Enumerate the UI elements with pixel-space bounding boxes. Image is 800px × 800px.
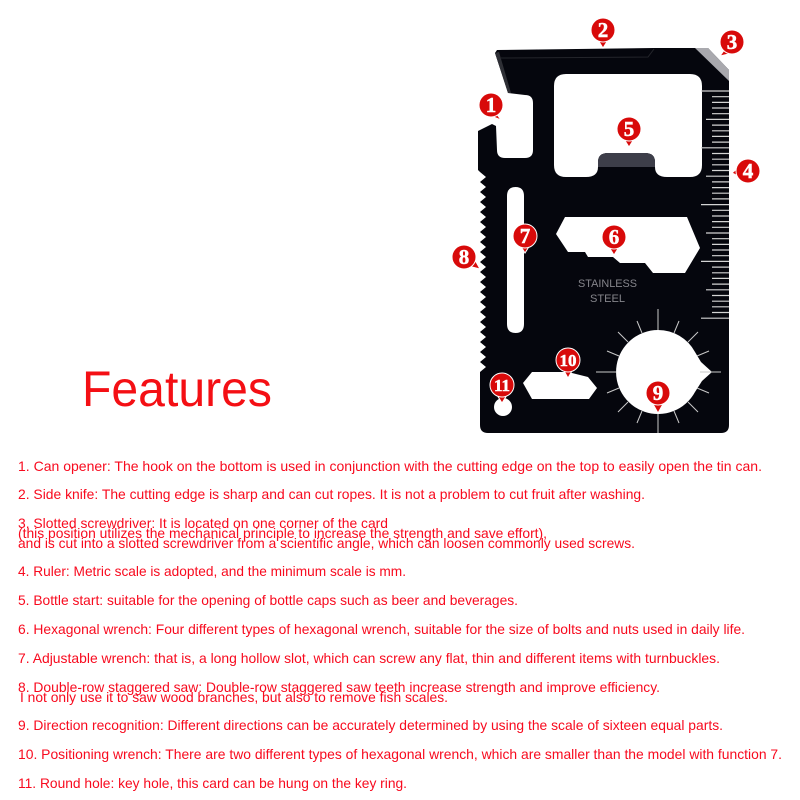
feature 8: 8. Double-row staggered saw: Double-row staggered saw teeth increase strength and improve efficiency. — [18, 679, 660, 695]
marker 8 — [452, 245, 480, 269]
marker 5 — [617, 117, 641, 147]
heading: Features: Features — [82, 361, 272, 417]
feature 1: 1. Can opener: The hook on the bottom is used in conjunction with the cutting edge on the top to easily open the tin can. — [18, 458, 762, 474]
feature 11: 11. Round hole: key hole, this card can be hung on the key ring. — [18, 775, 407, 791]
marker 3 — [720, 30, 744, 56]
marker 10: 10 — [560, 351, 576, 370]
marker 6 — [602, 225, 626, 255]
marker 6: 6 — [609, 225, 619, 249]
can opener blade bevel — [495, 52, 511, 93]
marker 8: 8 — [459, 245, 469, 269]
marker 11: 11 — [494, 376, 510, 395]
marker 9: 9 — [653, 381, 663, 405]
bottle opener lip — [598, 153, 655, 167]
marker 5: 5 — [624, 117, 634, 141]
multi-tool card illustration — [452, 18, 760, 433]
feature 3 — [18, 515, 635, 551]
stainless steel engraving — [578, 278, 637, 305]
ruler ticks — [701, 91, 729, 318]
marker 1 — [479, 93, 503, 120]
feature 9: 9. Direction recognition: Different directions can be accurately determined by using the scale of sixteen equal parts. — [18, 717, 723, 733]
marker 11 — [490, 373, 514, 403]
screwdriver bevel — [695, 48, 729, 81]
feature 5: 5. Bottle start: suitable for the opening of bottle caps such as beer and beverages. — [18, 592, 518, 608]
stainless steel engraving: STAINLESS — [578, 278, 637, 290]
feature 3: and is cut into a slotted screwdriver from a scientific angle, which can loosen commonly used screws. — [18, 535, 635, 551]
marker 4 — [732, 159, 760, 183]
feature 3: 3. Slotted screwdriver: It is located on one corner of the card — [18, 515, 388, 531]
marker 7: 7 — [520, 224, 530, 248]
feature list — [18, 458, 782, 791]
marker 2: 2 — [598, 18, 608, 42]
marker 7 — [513, 224, 537, 253]
marker 4: 4 — [743, 159, 754, 183]
marker 9 — [646, 381, 670, 413]
feature 7: 7. Adjustable wrench: that is, a long hollow slot, which can screw any flat, thin and different items with turnbuckles. — [18, 650, 720, 666]
feature 2: 2. Side knife: The cutting edge is sharp and can cut ropes. It is not a problem to cut fruit after washing. — [18, 486, 645, 502]
feature 10: 10. Positioning wrench: There are two different types of hexagonal wrench, which are smaller than the model with function 7. — [18, 746, 782, 762]
marker 2 — [591, 18, 615, 48]
feature 3: (this position utilizes the mechanical principle to increase the strength and save effort), — [18, 525, 547, 541]
card body with holes — [478, 48, 729, 433]
feature 8 — [18, 679, 660, 705]
marker 3: 3 — [727, 30, 737, 54]
marker 10 — [556, 348, 580, 378]
marker 1: 1 — [486, 93, 496, 117]
feature 6: 6. Hexagonal wrench: Four different types of hexagonal wrench, suitable for the size of bolts and nuts used in daily life. — [18, 621, 745, 637]
side knife edge — [500, 49, 654, 58]
compass direction ticks — [596, 309, 721, 433]
feature 8: I not only use it to saw wood branches, but also to remove fish scales. — [20, 689, 448, 705]
stainless steel engraving: STEEL — [590, 293, 625, 305]
feature 4: 4. Ruler: Metric scale is adopted, and the minimum scale is mm. — [18, 563, 406, 579]
